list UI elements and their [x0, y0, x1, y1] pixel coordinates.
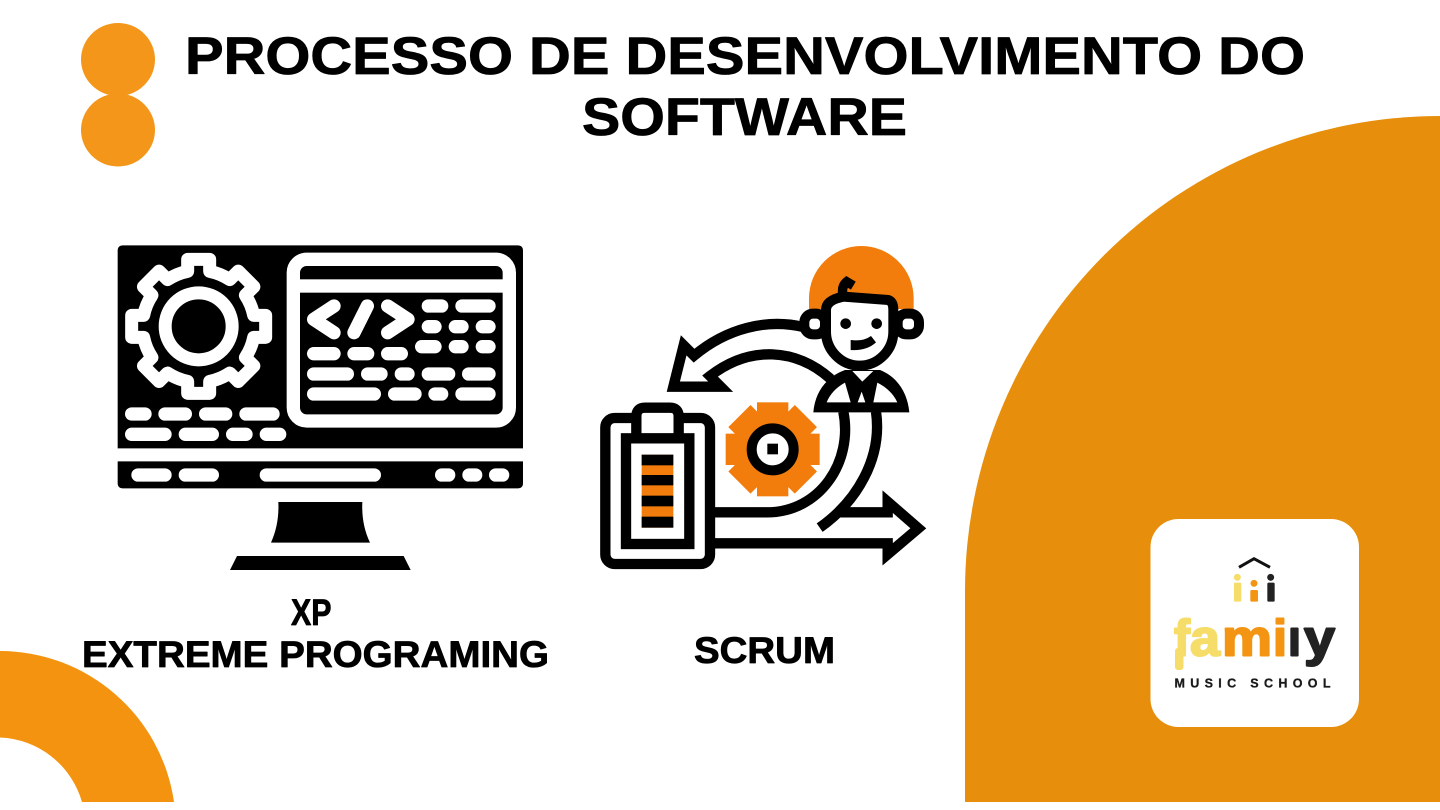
icon part: sprint arcs and forward arrow — [713, 412, 918, 554]
title — [185, 27, 1305, 147]
icon part: clipboard — [605, 408, 710, 564]
decorative orange circles top-left — [81, 23, 155, 166]
logo wordmark: l — [1288, 623, 1300, 664]
logo wordmark: y — [1304, 610, 1336, 667]
logo wordmark: f — [1174, 610, 1191, 667]
logo wordmark: a — [1190, 610, 1221, 667]
label: XP extreme programing: EXTREME PROGRAMING — [82, 634, 549, 675]
logo tagline: MUSIC SCHOOL — [1174, 677, 1331, 691]
logo wordmark: m — [1222, 610, 1272, 667]
logo wordmark — [1174, 610, 1336, 670]
logo icon: roof and three figures — [1234, 559, 1275, 602]
label: scrum: SCRUM — [694, 630, 835, 671]
icon part: orange hard hat — [809, 246, 914, 309]
icon part: developer figure — [804, 282, 919, 412]
icon: computer monitor with gear and code — [118, 245, 523, 570]
title: PROCESSO DE DESENVOLVIMENTO DO — [185, 27, 1305, 86]
icon part: curved return arrow — [673, 324, 831, 387]
label: XP extreme programing — [82, 592, 549, 675]
title: SOFTWARE — [582, 88, 907, 147]
logo wordmark: i — [1273, 610, 1287, 667]
label: XP extreme programing: XP — [291, 592, 331, 634]
decorative orange arc bottom-left — [0, 651, 174, 802]
icon: scrum cycle with developer, clipboard and gear — [605, 246, 919, 564]
decorative orange panel right — [965, 116, 1440, 802]
logo card: family music school — [1150, 519, 1359, 727]
icon part: orange gear — [726, 402, 820, 496]
